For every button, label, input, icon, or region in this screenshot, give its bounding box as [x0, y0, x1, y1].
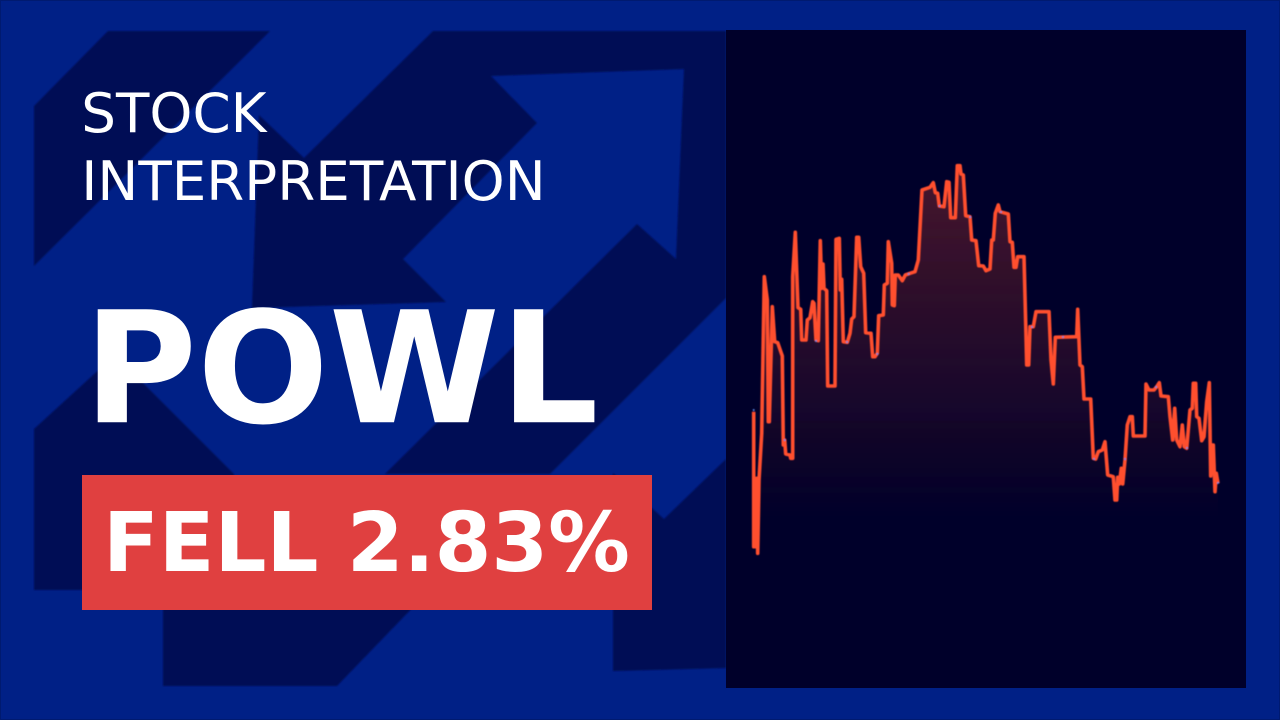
chart line — [754, 166, 1218, 553]
title: stock interpretation — [81, 81, 546, 213]
ticker: POWL: POWL — [84, 278, 599, 459]
background arrows — [34, 31, 726, 686]
chart area fill — [754, 166, 1218, 553]
callout: change badge: FELL 2.83% — [103, 496, 630, 591]
callout: change badge — [82, 475, 652, 610]
panel: chart background — [726, 30, 1246, 688]
title: stock interpretation: STOCK — [81, 81, 269, 145]
chart data markers — [753, 205, 1219, 484]
line chart — [753, 166, 1219, 553]
title: stock interpretation: INTERPRETATION — [81, 149, 546, 213]
